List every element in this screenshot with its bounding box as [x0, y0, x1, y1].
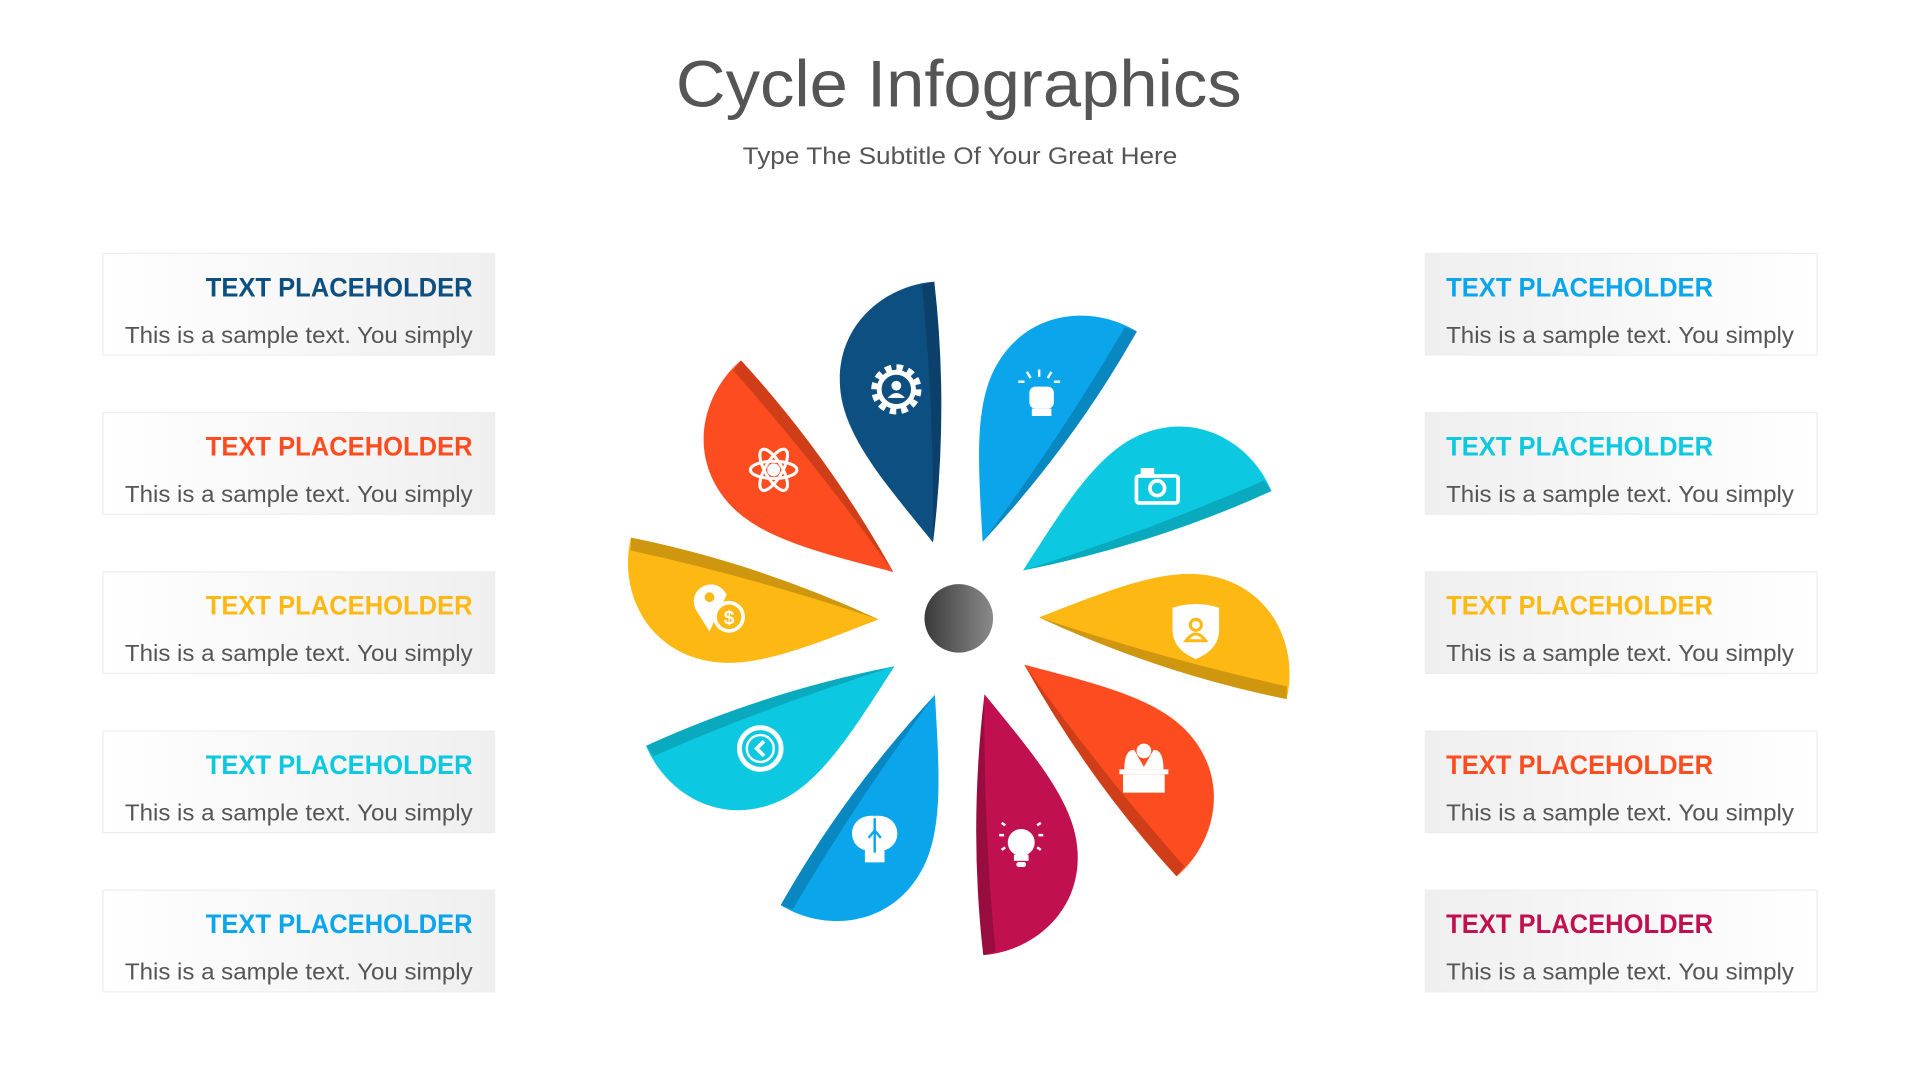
- title: Cycle Infographics: [676, 48, 1242, 122]
- petal 4: yellow shield: [1036, 529, 1316, 706]
- petal 3: cyan camera: [994, 401, 1274, 578]
- petal 9: yellow money pin: $: [724, 607, 735, 629]
- panel: left box 1: TEXT PLACEHOLDER: [206, 272, 473, 302]
- petal 2: blue fist: [907, 276, 1143, 547]
- panel: right box 3: This is a sample text. You simply: [1446, 640, 1794, 666]
- panel: right box 1: TEXT PLACEHOLDER: [1446, 272, 1713, 302]
- petal 10: red atom: [665, 356, 900, 627]
- petal 6: crimson bulb: [976, 694, 1078, 955]
- panel: right box 3: TEXT PLACEHOLDER: [1446, 591, 1713, 621]
- petal 5: red podium: [1018, 610, 1253, 881]
- petal 1: dark blue gear: [840, 282, 941, 542]
- panel: left box 3: [103, 572, 495, 673]
- petal 7: blue brain: [775, 690, 1010, 961]
- panel: left box 2: [103, 413, 495, 514]
- panel: right box 4: TEXT PLACEHOLDER: [1446, 750, 1713, 780]
- panel: left box 3: TEXT PLACEHOLDER: [206, 591, 473, 621]
- panel: right box 1: [1425, 253, 1817, 355]
- cycle flower chart: [602, 276, 1316, 961]
- panel: right box 5: This is a sample text. You simply: [1446, 959, 1794, 985]
- panel: right box 5: TEXT PLACEHOLDER: [1446, 909, 1713, 939]
- panel: left box 4: [103, 731, 495, 833]
- subtitle: Type The Subtitle Of Your Great Here: [743, 143, 1177, 170]
- panel: left box 1: This is a sample text. You simply: [125, 322, 473, 348]
- panel: right box 2: TEXT PLACEHOLDER: [1446, 432, 1713, 462]
- center circle: [924, 584, 993, 653]
- panel: left box 5: [103, 890, 495, 992]
- panel: right box 2: [1425, 413, 1817, 514]
- panel: right box 1: This is a sample text. You simply: [1446, 322, 1794, 348]
- panel: left box 2: This is a sample text. You simply: [125, 481, 473, 507]
- panel: right box 3: [1425, 572, 1817, 673]
- panel: left box 5: This is a sample text. You simply: [125, 959, 473, 985]
- panel: right box 4: [1425, 731, 1817, 833]
- panel: right box 5: [1425, 890, 1817, 992]
- petal 9: yellow money pin: [602, 531, 881, 708]
- panel: left box 2: TEXT PLACEHOLDER: [206, 432, 473, 462]
- petal 8: cyan clock: [644, 658, 923, 836]
- panel: left box 3: This is a sample text. You simply: [125, 640, 473, 666]
- panel: left box 4: TEXT PLACEHOLDER: [206, 750, 473, 780]
- panel: right box 2: This is a sample text. You simply: [1446, 481, 1794, 507]
- panel: left box 5: TEXT PLACEHOLDER: [206, 909, 473, 939]
- panel: right box 4: This is a sample text. You simply: [1446, 799, 1794, 825]
- panel: left box 4: This is a sample text. You simply: [125, 799, 473, 825]
- panel: left box 1: [103, 253, 495, 355]
